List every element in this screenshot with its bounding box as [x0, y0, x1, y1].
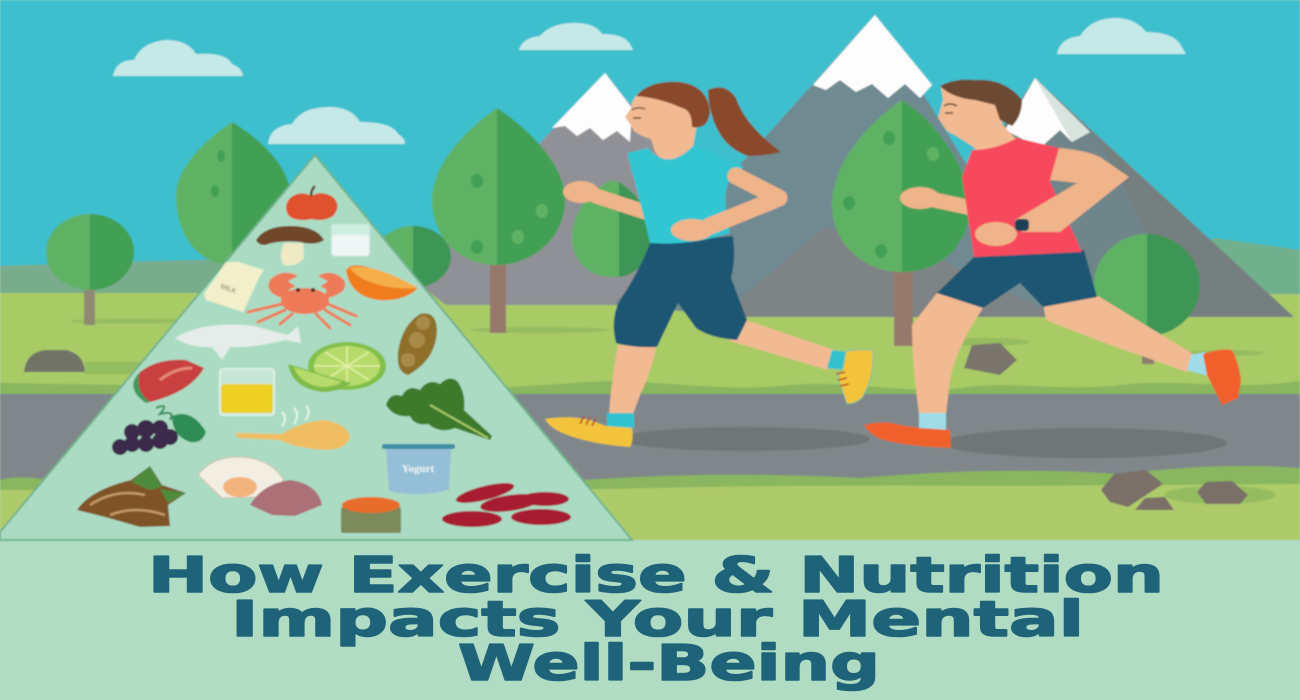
shirt — [962, 138, 1082, 257]
hair — [636, 82, 710, 127]
rear leg — [730, 317, 834, 370]
grass shadows — [70, 318, 1265, 374]
front arm — [1015, 148, 1129, 232]
crab — [248, 273, 356, 328]
front hand — [671, 219, 713, 241]
front shoe — [545, 417, 633, 447]
rear sock — [1187, 352, 1208, 376]
lower grass — [0, 466, 1300, 545]
snow caps — [552, 15, 1090, 148]
nut pod — [398, 313, 437, 375]
title line 3: Well-Being — [458, 635, 880, 692]
neck and face — [938, 87, 1017, 152]
back arm — [596, 196, 645, 212]
rear leg — [1043, 296, 1193, 372]
tree: centre — [832, 100, 970, 346]
front lower leg — [609, 345, 657, 414]
tree: far left — [46, 214, 134, 325]
tree: tall middle — [432, 108, 565, 333]
tree: behind pyramid — [176, 122, 290, 265]
rear sock — [827, 350, 847, 370]
front sock — [919, 413, 946, 430]
walnuts — [77, 466, 186, 527]
shell — [250, 480, 322, 516]
tree: right — [1094, 234, 1200, 364]
woman runner — [545, 82, 873, 447]
sky — [0, 0, 1300, 300]
orange — [346, 265, 418, 300]
distant hills — [0, 238, 1300, 300]
tree: behind woman — [572, 180, 651, 277]
mountains — [390, 15, 1294, 318]
title — [148, 547, 1164, 692]
rear shoe laces — [836, 372, 849, 386]
grapes and leaf — [112, 406, 206, 455]
clouds — [113, 18, 1186, 144]
title line 1: How Exercise & Nutrition — [148, 547, 1164, 604]
upper grass — [0, 293, 1300, 400]
mushroom — [256, 226, 324, 265]
rear shoe — [838, 350, 873, 404]
road — [0, 381, 1300, 492]
man eye and brow — [944, 104, 957, 113]
front sock — [607, 413, 634, 428]
yogurt tub — [382, 444, 455, 494]
rock: left — [24, 350, 85, 372]
juice glass — [220, 369, 274, 415]
food items — [77, 186, 571, 533]
fish — [175, 324, 301, 360]
front leg — [912, 293, 983, 414]
hair — [940, 80, 1022, 126]
woman eye and brow — [632, 108, 645, 118]
yogurt tub: Yogurt — [402, 463, 435, 475]
back arm — [925, 198, 972, 208]
scallop shell — [198, 457, 284, 498]
kidney beans — [442, 479, 571, 527]
spinach — [386, 378, 492, 440]
chicken leg — [235, 406, 350, 450]
bottom panel — [0, 540, 1300, 700]
limes — [288, 342, 386, 392]
shirt — [627, 145, 744, 244]
tree: small behind pyramid — [375, 226, 451, 288]
milk glass — [331, 224, 370, 256]
rear shoe — [1203, 350, 1241, 405]
watermelon — [133, 360, 204, 403]
pyramid — [0, 155, 632, 540]
watch — [1015, 219, 1029, 231]
front hand — [975, 222, 1017, 246]
back hand — [900, 187, 940, 209]
front shoe laces — [580, 416, 596, 426]
man runner — [864, 80, 1241, 448]
rocks: lower right — [1101, 470, 1248, 510]
milk bottle: MILK — [219, 283, 237, 296]
back hand — [563, 181, 599, 203]
front arm — [710, 176, 779, 226]
rock: centre — [964, 343, 1017, 375]
front shoe — [864, 422, 951, 448]
neck and face — [625, 92, 697, 162]
caviar cup — [341, 497, 401, 533]
far grass right — [1180, 294, 1300, 324]
leggings — [614, 236, 747, 347]
title line 2: Impacts Your Mental — [231, 591, 1084, 648]
apple — [286, 186, 338, 220]
scallop meat — [223, 477, 257, 497]
shorts — [937, 250, 1097, 308]
ponytail — [708, 87, 781, 156]
milk bottle — [204, 262, 264, 312]
